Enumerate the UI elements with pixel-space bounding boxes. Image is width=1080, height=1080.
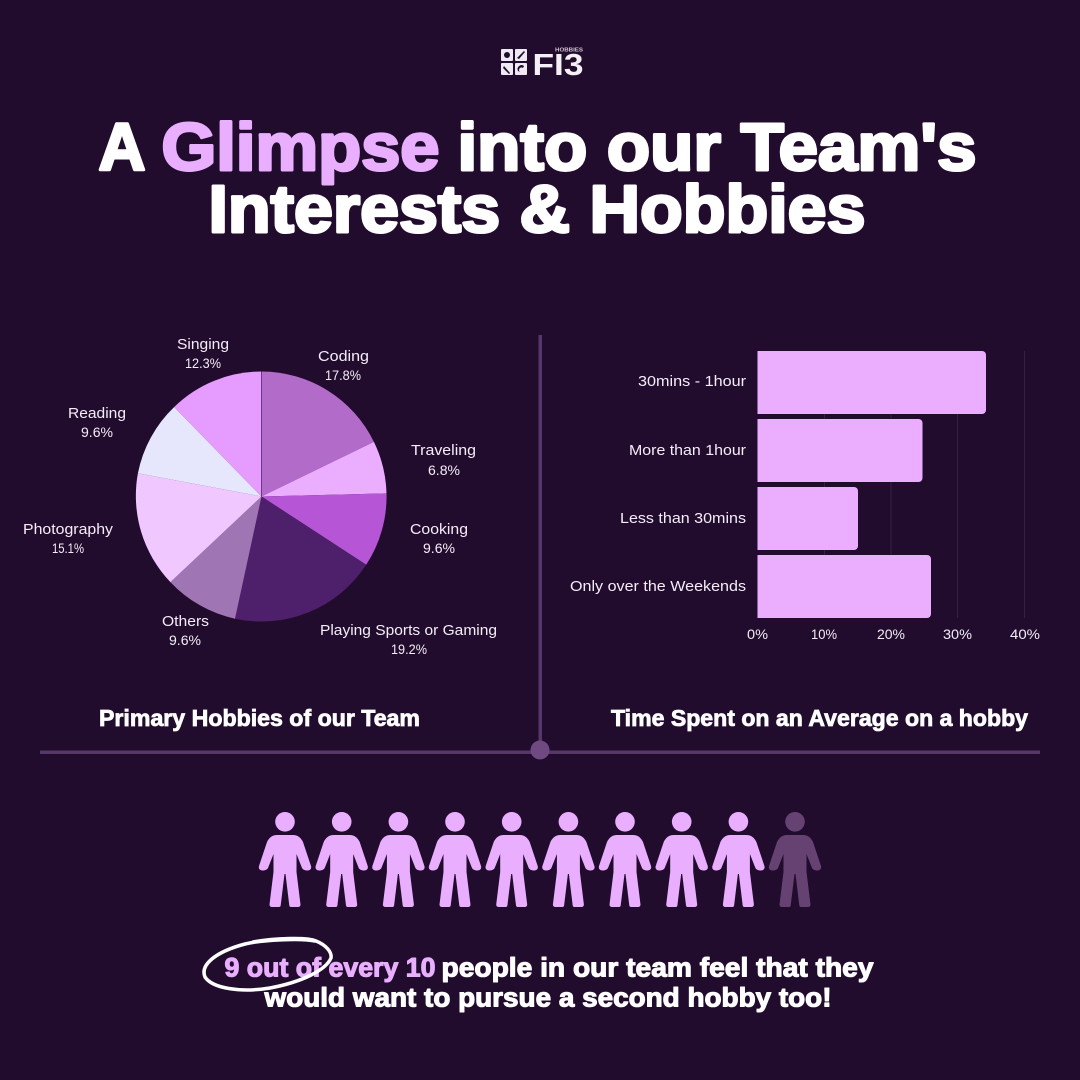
callout text — [224, 952, 874, 1012]
title: into our Team's — [458, 110, 976, 185]
bar axis labels: 0% — [747, 627, 768, 642]
bar: 30mins - 1hour — [758, 351, 986, 414]
label: Photography: Photography — [23, 522, 114, 538]
slice: Playing Sports or Gaming — [235, 496, 366, 622]
logo — [501, 47, 584, 82]
slice: Traveling — [262, 442, 386, 496]
bar category labels — [570, 374, 746, 595]
label: Singing: Singing — [177, 337, 229, 353]
label: Cooking — [410, 522, 468, 556]
slice: Cooking — [262, 493, 387, 565]
label: Playing Sports or Gaming — [320, 623, 497, 657]
label: Cooking: 9.6% — [423, 541, 455, 556]
title — [98, 110, 976, 247]
logo wordmark: FI3 — [532, 47, 584, 82]
label: Others — [162, 614, 209, 648]
bar: Only over the Weekends — [758, 555, 931, 618]
bar category labels: Only over the Weekends — [570, 579, 746, 595]
label: Singing: 12.3% — [185, 356, 221, 371]
label: Traveling: Traveling — [411, 443, 476, 459]
slice: Reading — [138, 407, 262, 496]
dividers — [40, 335, 1040, 760]
heading: pie chart: Primary Hobbies of our Team — [99, 705, 420, 731]
label: Traveling: 6.8% — [428, 463, 460, 478]
heading: bar chart: Time Spent on an Average on a hobby — [611, 705, 1028, 731]
light figures — [259, 812, 765, 907]
bar category labels: Less than 30mins — [620, 511, 746, 527]
label: Singing — [177, 337, 229, 371]
bar axis labels: 40% — [1010, 627, 1040, 642]
label: Photography — [23, 522, 114, 556]
bar: Less than 30mins — [758, 487, 858, 550]
label: Reading: 9.6% — [81, 425, 113, 440]
bar axis labels — [747, 627, 1040, 642]
bar axis labels: 10% — [811, 627, 837, 642]
logo tagline: HOBBIES — [555, 48, 584, 54]
label: Playing Sports or Gaming: 19.2% — [391, 642, 427, 657]
slice: Others — [170, 496, 262, 619]
title: Interests & Hobbies — [208, 172, 866, 247]
title: A — [98, 110, 146, 185]
slice: Photography — [136, 473, 262, 582]
bar: More than 1hour — [758, 419, 922, 482]
title: Glimpse — [162, 110, 440, 185]
label: Others: 9.6% — [169, 633, 201, 648]
label: Coding: Coding — [318, 349, 369, 365]
slice: Coding — [262, 372, 374, 496]
bar category labels: More than 1hour — [629, 443, 746, 459]
label: Photography: 15.1% — [52, 541, 84, 556]
icon: logo tiles — [501, 49, 527, 75]
dark figure — [769, 812, 821, 907]
bar chart: time spent — [570, 351, 1040, 642]
pictogram: 9 of 10 people — [259, 812, 821, 907]
label: Coding: 17.8% — [325, 368, 361, 383]
pie labels — [23, 337, 497, 657]
label: Reading — [68, 406, 126, 440]
bar axis labels: 30% — [943, 627, 972, 642]
bar axis labels: 20% — [877, 627, 905, 642]
hand-drawn circle highlight — [204, 938, 331, 990]
slice: Singing — [174, 372, 262, 496]
label: Traveling — [411, 443, 476, 478]
callout text: 9 out of every 10 — [224, 952, 436, 982]
label: Others: Others — [162, 614, 209, 630]
callout text: people in our team feel that they — [442, 952, 874, 982]
label: Playing Sports or Gaming: Playing Sports or Gaming — [320, 623, 497, 639]
pie chart: primary hobbies — [136, 372, 387, 622]
label: Cooking: Cooking — [410, 522, 468, 538]
callout text: would want to pursue a second hobby too! — [263, 982, 831, 1012]
label: Coding — [318, 349, 369, 383]
label: Reading: Reading — [68, 406, 126, 422]
bar category labels: 30mins - 1hour — [638, 374, 746, 390]
